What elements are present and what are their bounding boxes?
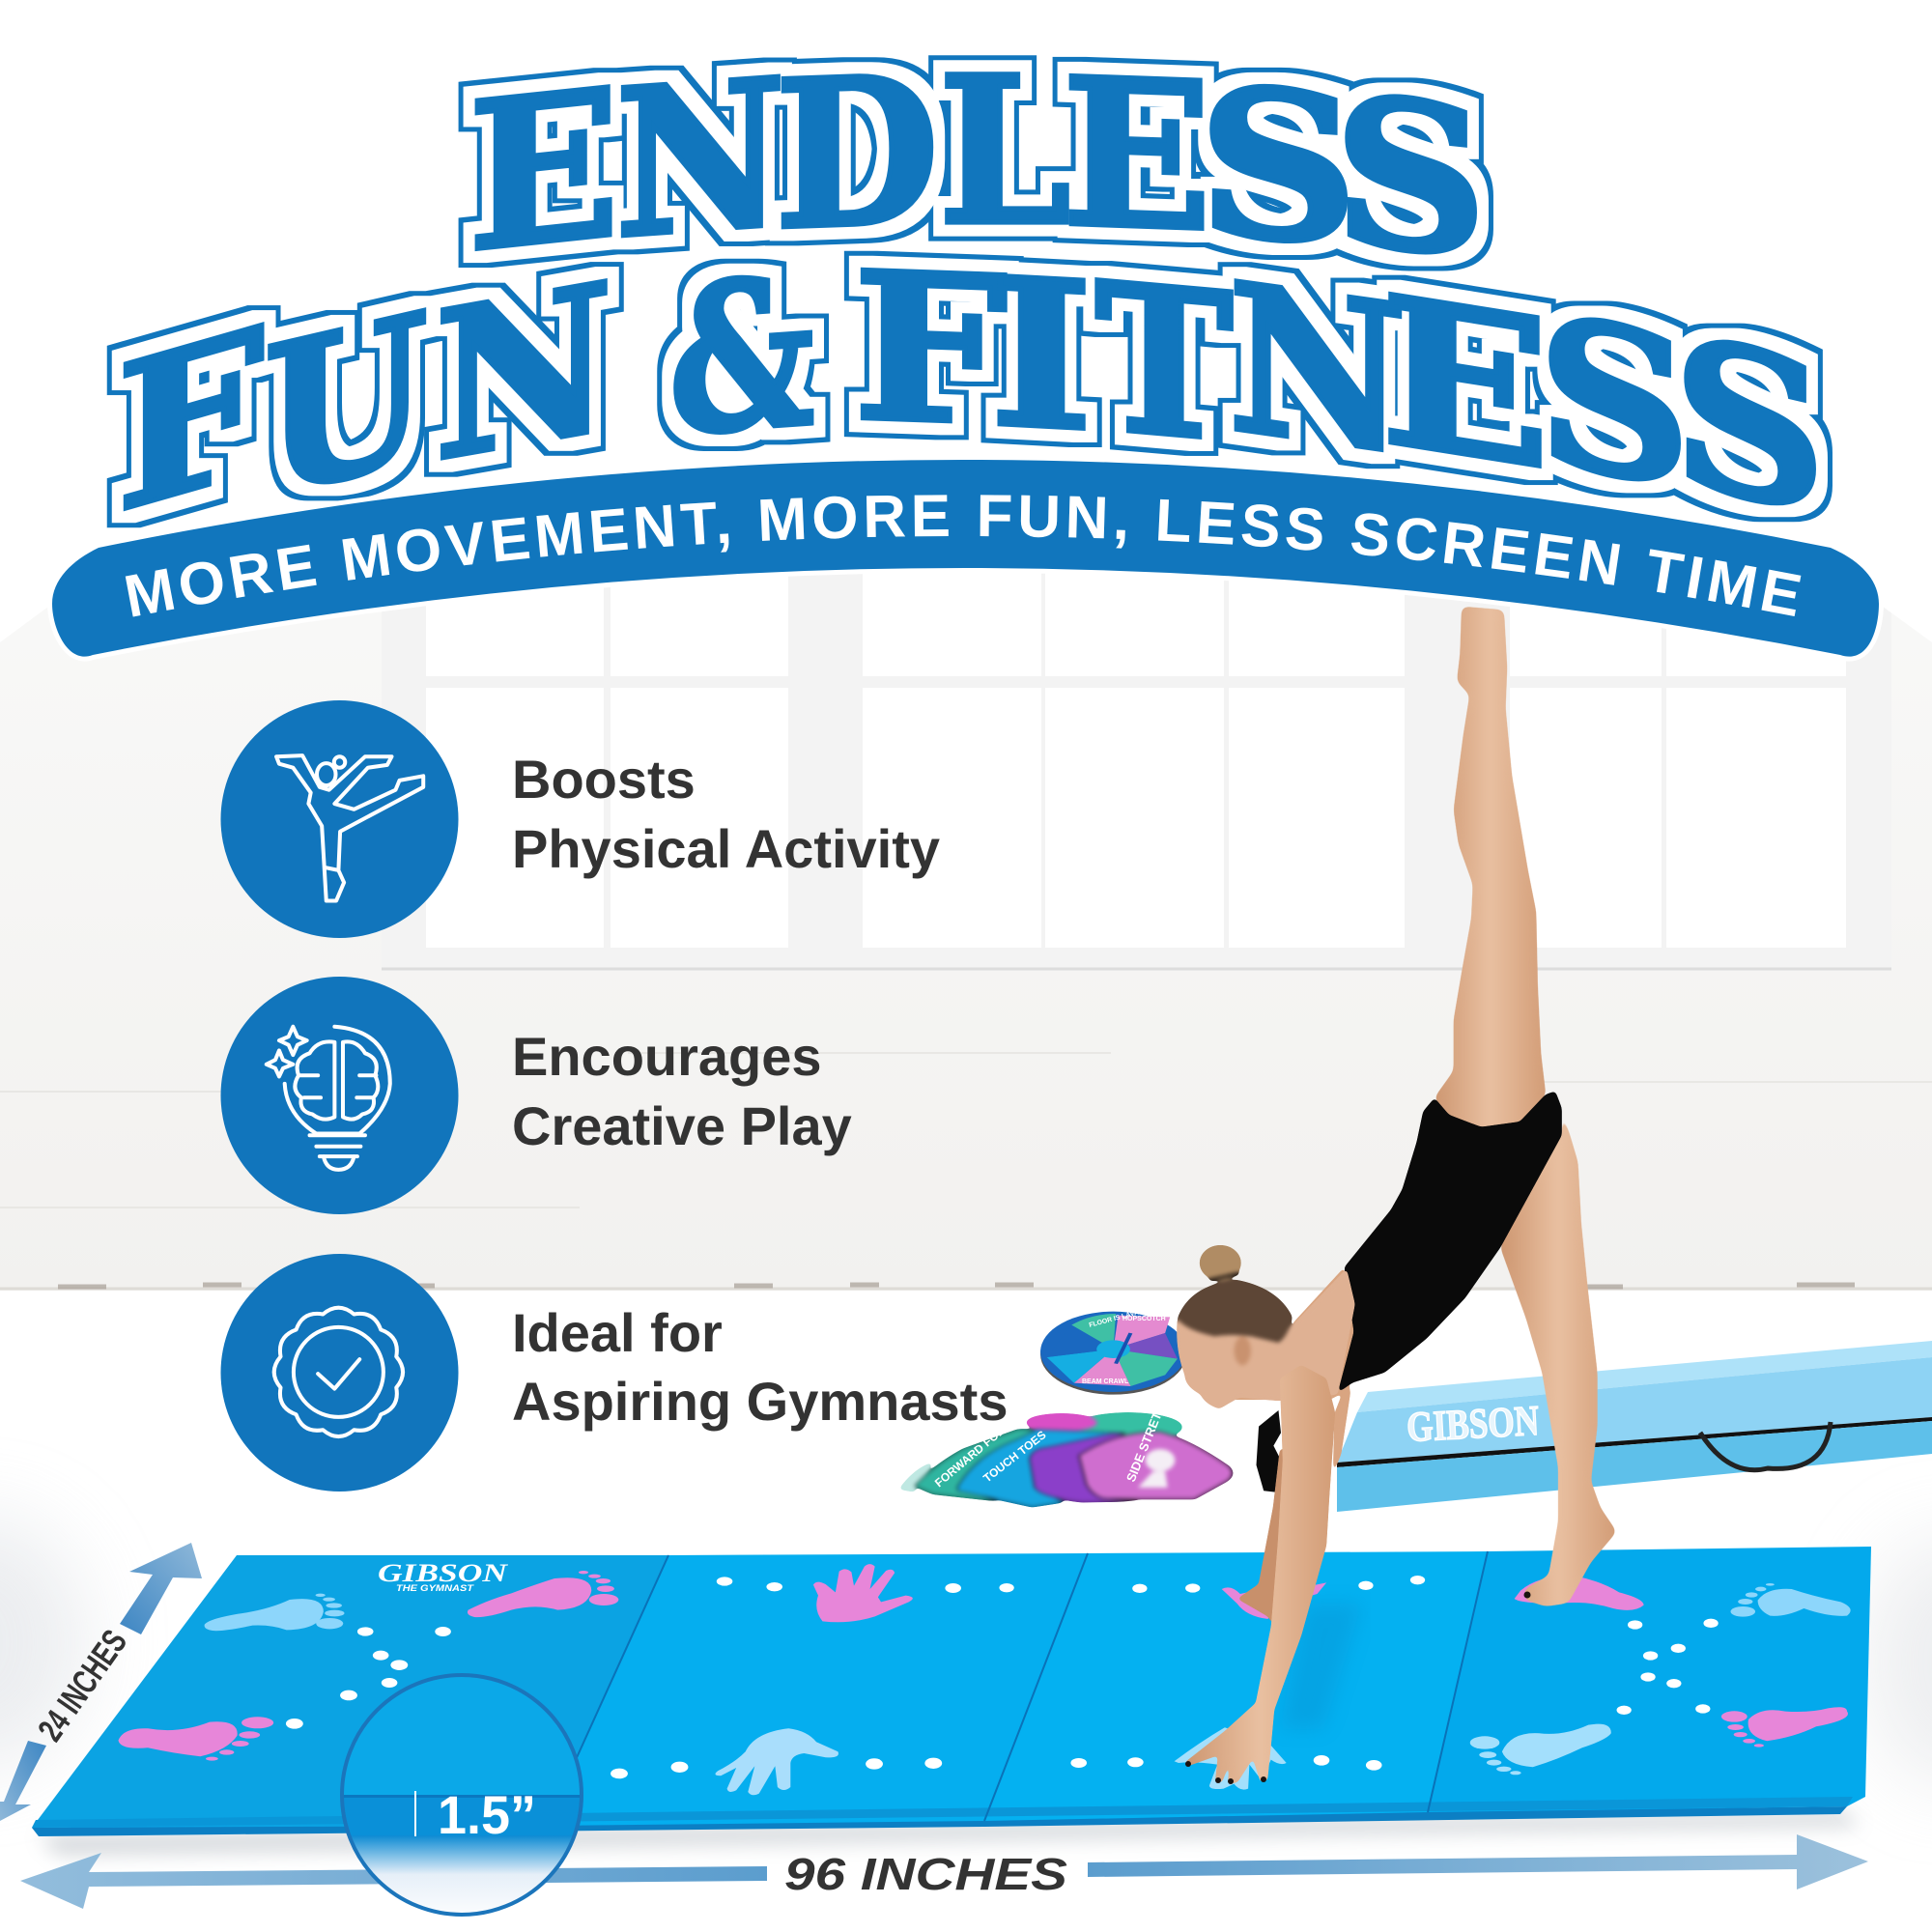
thickness lens bbox=[338, 1671, 589, 1922]
title line 1: S bbox=[1334, 49, 1487, 304]
title line 2 bbox=[116, 228, 1826, 562]
spinner labels bbox=[1082, 1309, 1166, 1385]
panel: benefit 3 bbox=[220, 1254, 1008, 1492]
panel: benefit 2 bbox=[220, 977, 852, 1214]
beam logo: GIBSON bbox=[1406, 1397, 1541, 1451]
title line 2: T bbox=[1095, 238, 1233, 488]
spinner labels: BEAM CRAWL bbox=[1082, 1378, 1129, 1385]
text: encourages creative play: Creative Play bbox=[512, 1095, 852, 1156]
activity cards bbox=[899, 1393, 1233, 1507]
mat logo: GIBSON bbox=[378, 1559, 509, 1587]
nails bbox=[1185, 1592, 1530, 1784]
text: ideal for aspiring gymnasts: Ideal for bbox=[512, 1302, 723, 1363]
windows bbox=[382, 541, 1891, 969]
mat graphics: right side bbox=[999, 1567, 1851, 1790]
title line 2: N bbox=[1228, 238, 1407, 501]
text: ideal for aspiring gymnasts: Aspiring Gymnasts bbox=[512, 1371, 1008, 1432]
gymnast bbox=[1177, 607, 1616, 1784]
spinner labels: FLOOR IS LAVA bbox=[1089, 1309, 1140, 1329]
balance beam bbox=[1337, 1341, 1932, 1512]
mat logo subtitle: THE GYMNAST bbox=[396, 1583, 475, 1593]
title line 1: L bbox=[938, 32, 1071, 270]
rear arm bbox=[1237, 1449, 1290, 1626]
mat shadow bbox=[39, 1811, 1860, 1855]
lens tick bbox=[414, 1791, 416, 1836]
title line 1: E bbox=[1063, 33, 1211, 277]
lens label: 1.5” bbox=[438, 1784, 536, 1845]
arm shadow on mat bbox=[1280, 1604, 1362, 1729]
mat graphics: left side bbox=[118, 1564, 961, 1795]
title line 2: F bbox=[116, 282, 265, 558]
game spinner disc bbox=[1040, 1309, 1186, 1395]
title line 2: S bbox=[1673, 289, 1826, 562]
card labels: SIDE STRETCH bbox=[1123, 1393, 1171, 1484]
icon: gymnast circle bbox=[220, 700, 458, 938]
title line 2: S bbox=[1538, 269, 1690, 537]
title line 1: D bbox=[775, 31, 939, 275]
tagline text: MORE MOVEMENT, MORE FUN, LESS SCREEN TIME bbox=[126, 495, 1801, 616]
label: 96 inches: 96 INCHES bbox=[784, 1849, 1067, 1899]
title line 2: E bbox=[1380, 251, 1550, 516]
arrow: 96 inches right bbox=[1088, 1834, 1868, 1889]
arrow: 96 inches left bbox=[20, 1853, 767, 1909]
title line 2: I bbox=[990, 233, 1093, 477]
leotard strap bbox=[1277, 1321, 1292, 1373]
card labels: TOUCH TOES bbox=[980, 1428, 1048, 1485]
title line 1: E bbox=[468, 43, 620, 298]
arrow: 24 inches down bbox=[0, 1741, 46, 1821]
card labels: FORWARD FOLD bbox=[932, 1419, 1013, 1490]
strap behind arm bbox=[1257, 1410, 1284, 1492]
banner: arched tagline bbox=[52, 460, 1884, 661]
arrow: 24 inches up bbox=[120, 1543, 202, 1634]
title line 1 bbox=[468, 31, 1487, 304]
title line 2: U bbox=[264, 268, 428, 544]
head bbox=[1177, 1245, 1355, 1408]
leotard bbox=[1338, 1092, 1562, 1393]
icon: badge check circle bbox=[220, 1254, 458, 1492]
title: endless fun & fitness bbox=[116, 31, 1826, 562]
label: 24 inches: 24 INCHES bbox=[30, 1623, 134, 1748]
spinner labels: HOPSCOTCH bbox=[1122, 1316, 1166, 1322]
text: boosts physical activity: Physical Activity bbox=[512, 818, 940, 879]
torso skin bbox=[1224, 1267, 1354, 1474]
white top area bbox=[0, 0, 1932, 642]
raised and standing legs bbox=[1435, 607, 1616, 1606]
title line 1: N bbox=[615, 33, 785, 284]
front arm and hand bbox=[1184, 1365, 1335, 1784]
panel: benefit 1 bbox=[220, 700, 940, 938]
title line 1: S bbox=[1198, 43, 1358, 292]
text: encourages creative play: Encourages bbox=[512, 1026, 822, 1087]
title line 2: & bbox=[669, 233, 814, 481]
folding mat bbox=[32, 1547, 1871, 1836]
text: boosts physical activity: Boosts bbox=[512, 749, 696, 810]
icon: brain bulb circle bbox=[220, 977, 458, 1214]
title line 2: F bbox=[853, 228, 1008, 471]
card labels bbox=[932, 1393, 1171, 1490]
title line 2: N bbox=[435, 237, 612, 507]
